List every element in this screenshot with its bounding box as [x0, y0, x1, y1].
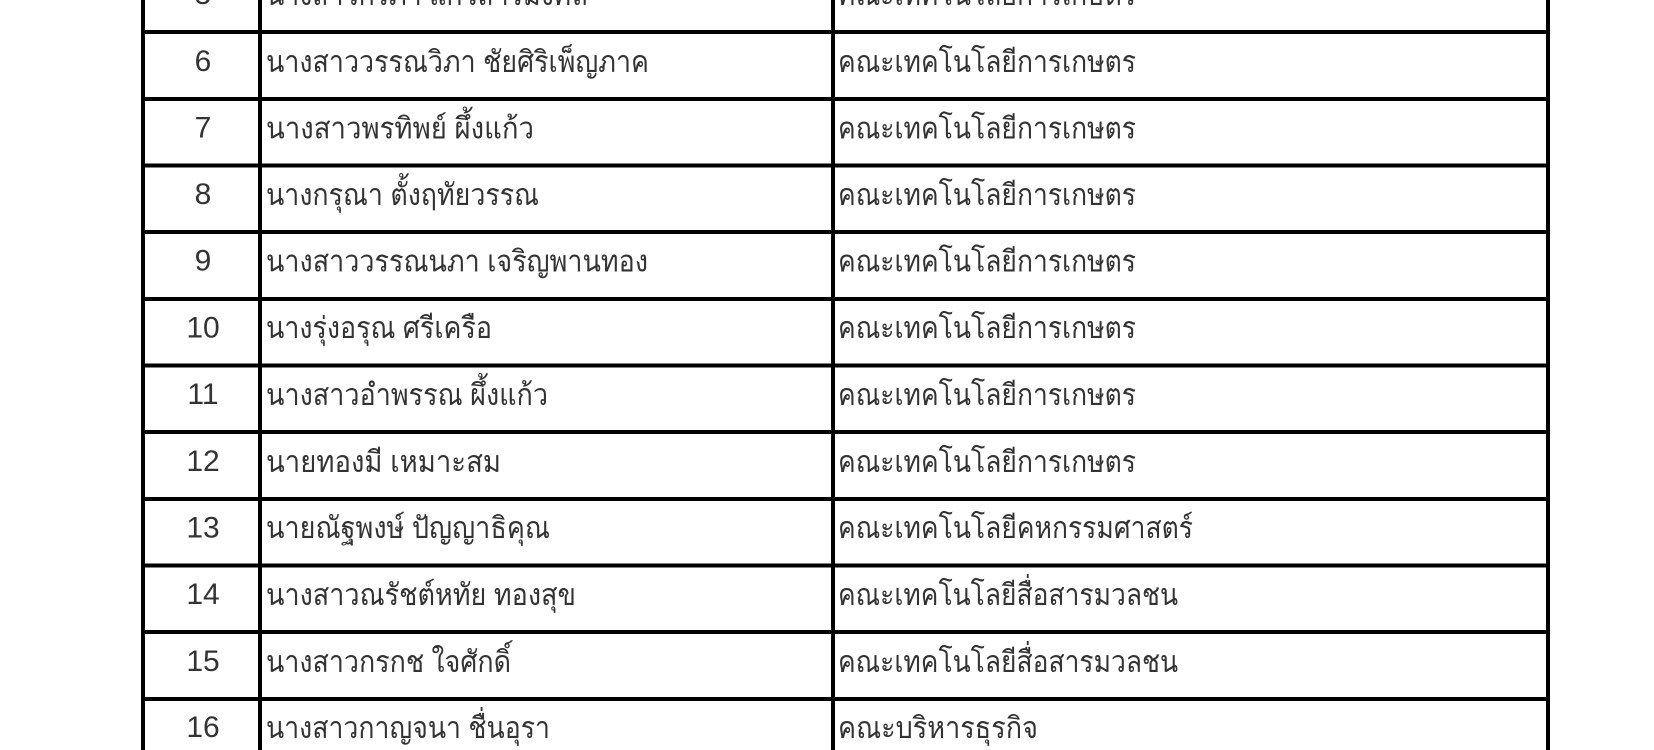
row 13	[186, 510, 1193, 547]
row 7: นางสาวพรทิพย์ ผึ้งแก้ว	[266, 106, 534, 146]
row 8: 8	[195, 178, 211, 211]
row 13: 13	[186, 512, 220, 544]
row 10	[186, 310, 1136, 347]
row 12: นายทองมี เหมาะสม	[266, 446, 501, 479]
row 12	[186, 444, 1136, 479]
row 12: 12	[186, 445, 220, 478]
row 8	[195, 173, 1136, 214]
row 9: 9	[195, 244, 211, 278]
row 14: 14	[186, 578, 220, 611]
row 8: คณะเทคโนโลยีการเกษตร	[838, 177, 1136, 212]
row 13: คณะเทคโนโลยีคหกรรมศาสตร์	[838, 510, 1193, 545]
row 15: 15	[186, 645, 220, 678]
row 16: คณะบริหารธุรกิจ	[838, 712, 1038, 747]
row 12: คณะเทคโนโลยีการเกษตร	[838, 444, 1136, 479]
row 14: คณะเทคโนโลยีสื่อสารมวลชน	[838, 574, 1178, 612]
row 9	[195, 244, 1136, 278]
row 6	[195, 43, 1136, 79]
row 11: คณะเทคโนโลยีการเกษตร	[838, 377, 1136, 412]
row 11	[187, 373, 1136, 412]
row 9: คณะเทคโนโลยีการเกษตร	[838, 244, 1136, 278]
row 7	[195, 106, 1136, 146]
row 15	[186, 640, 1178, 679]
row 8: นางกรุณา ตั้งฤทัยวรรณ	[266, 173, 539, 214]
row 7: คณะเทคโนโลยีการเกษตร	[838, 110, 1136, 146]
row 16: 16	[186, 711, 220, 744]
row 15: คณะเทคโนโลยีสื่อสารมวลชน	[838, 641, 1178, 679]
row 10: คณะเทคโนโลยีการเกษตร	[838, 310, 1136, 345]
row 13: นายณัฐพงษ์ ปัญญาธิคุณ	[266, 511, 550, 547]
row 14: นางสาวณรัชต์หทัย ทองสุข	[266, 578, 576, 614]
row 6: นางสาววรรณวิภา ชัยศิริเพ็ญภาค	[266, 43, 649, 79]
row 16: นางสาวกาญจนา ชื่นอุรา	[266, 707, 550, 747]
row 14	[186, 574, 1178, 614]
row 5	[195, 0, 1136, 12]
row 7: 7	[195, 112, 211, 144]
row 9: นางสาววรรณนภา เจริญพานทอง	[266, 246, 648, 278]
row 16	[186, 707, 1038, 747]
row 11: นางสาวอำพรรณ ผึ้งแก้ว	[266, 373, 548, 412]
row 10: นางรุ่งอรุณ ศรีเครือ	[266, 312, 492, 347]
row 6: 6	[195, 45, 211, 78]
row 11: 11	[187, 378, 219, 411]
row 15: นางสาวกรกช ใจศักดิ์	[266, 640, 513, 679]
row 10: 10	[186, 312, 220, 344]
row 6: คณะเทคโนโลยีการเกษตร	[838, 44, 1136, 79]
